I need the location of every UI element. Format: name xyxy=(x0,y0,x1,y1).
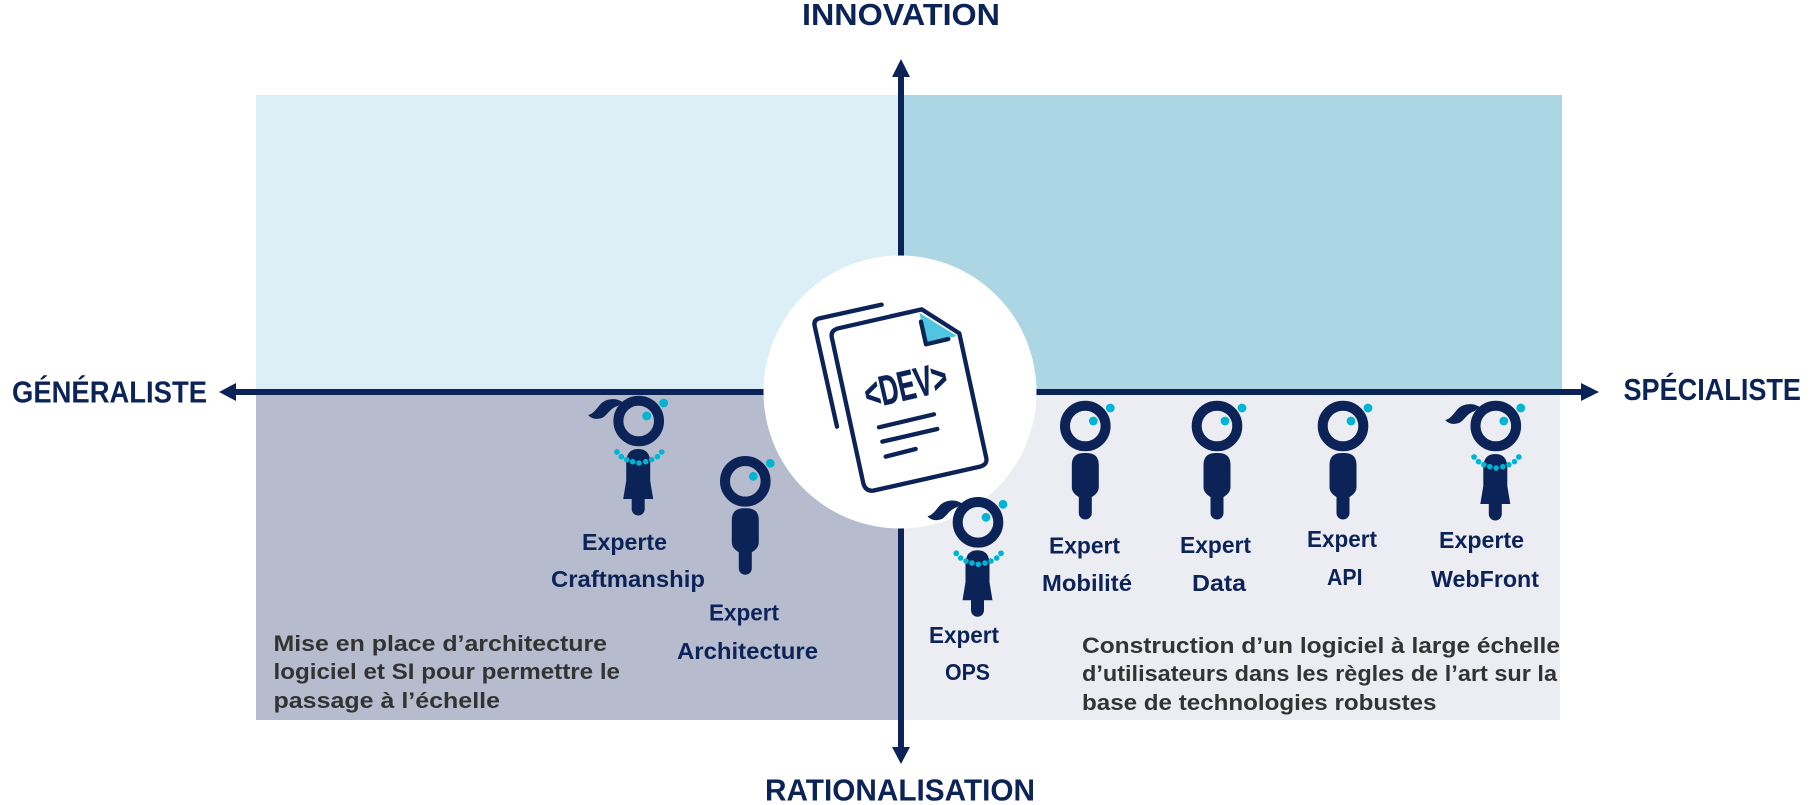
label: expert api: API xyxy=(1327,564,1362,590)
figure: expert architecture xyxy=(725,459,775,575)
text block: right description: d’utilisateurs dans les règles de l’art sur la xyxy=(1082,661,1558,686)
figure: expert api xyxy=(1323,404,1372,520)
arrow: vertical axis xyxy=(892,59,910,764)
text block: left description: logiciel et SI pour permettre le xyxy=(274,659,620,684)
figure: experte craftmanship xyxy=(588,399,668,516)
center circle xyxy=(764,256,1036,528)
label: expert data: Data xyxy=(1192,570,1246,596)
label: expert mobilité xyxy=(1042,532,1132,596)
label: expert mobilité: Mobilité xyxy=(1042,570,1132,596)
arrow: horizontal axis xyxy=(219,383,1599,401)
label: experte craftmanship: Experte xyxy=(582,529,667,555)
label: expert architecture xyxy=(677,600,818,664)
axis label: généraliste: GÉNÉRALISTE xyxy=(12,374,207,410)
label: expert architecture: Expert xyxy=(709,600,779,626)
text block: right description xyxy=(1082,633,1560,715)
label: expert api: Expert xyxy=(1307,526,1377,552)
panel: top-right quadrant xyxy=(901,95,1562,392)
label: expert ops: OPS xyxy=(945,659,990,685)
label: expert data: Expert xyxy=(1180,532,1251,558)
figure: expert ops xyxy=(928,500,1007,617)
text block: left description: passage à l’échelle xyxy=(274,688,500,713)
figure: expert mobilité xyxy=(1065,404,1115,520)
label: experte craftmanship: Craftmanship xyxy=(551,566,705,592)
figure: expert data xyxy=(1197,404,1246,520)
text block: right description: Construction d’un logiciel à large échelle xyxy=(1082,633,1560,658)
figure: experte webfront xyxy=(1445,404,1525,520)
label: expert ops xyxy=(929,622,999,685)
icon: dev document: <DEV> xyxy=(859,353,952,418)
panel: top-left quadrant xyxy=(256,95,901,392)
label: expert architecture: Architecture xyxy=(677,638,818,664)
panel: bottom-right quadrant xyxy=(901,392,1560,720)
label: experte craftmanship xyxy=(551,529,705,592)
text block: left description: Mise en place d’architecture xyxy=(274,631,607,656)
label: experte webfront: Experte xyxy=(1439,527,1524,553)
text block: right description: base de technologies robustes xyxy=(1082,690,1436,715)
panel: bottom-left quadrant xyxy=(256,392,901,720)
label: expert api xyxy=(1307,526,1377,590)
label: expert data xyxy=(1180,532,1251,596)
label: experte webfront: WebFront xyxy=(1431,566,1539,592)
label: experte webfront xyxy=(1431,527,1539,592)
icon: dev document xyxy=(814,305,986,491)
label: expert ops: Expert xyxy=(929,622,999,648)
label: expert mobilité: Expert xyxy=(1049,532,1120,558)
text block: left description xyxy=(274,631,620,713)
